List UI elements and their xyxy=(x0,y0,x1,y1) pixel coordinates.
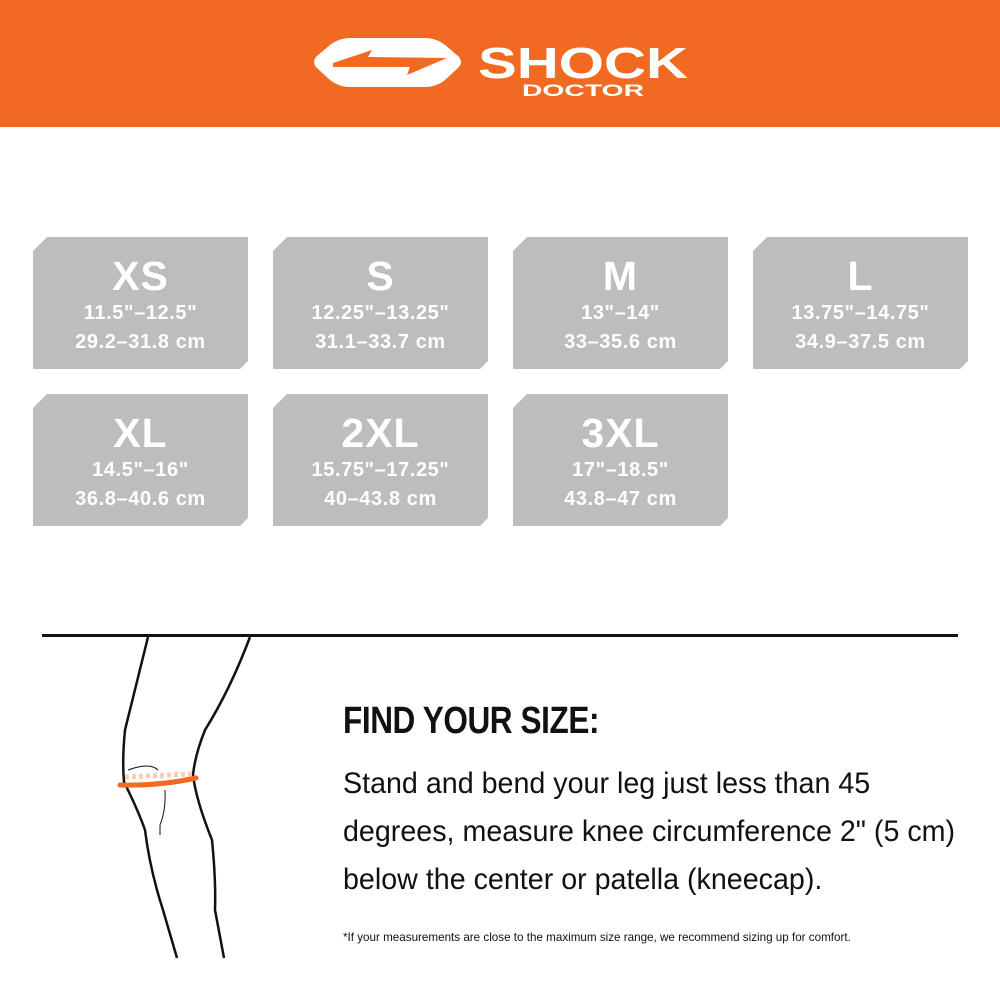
card XL: 14.5"–16" xyxy=(92,459,189,481)
card M: 13"–14" xyxy=(581,302,660,324)
card XS: XS xyxy=(112,253,169,299)
card S: 31.1–33.7 cm xyxy=(315,331,446,353)
card 3XL: 43.8–47 cm xyxy=(564,488,677,510)
card 2XL: 15.75"–17.25" xyxy=(312,459,450,481)
card S xyxy=(273,237,488,369)
logo: SHOCK xyxy=(478,39,688,88)
leg illustration xyxy=(118,637,252,958)
header bar xyxy=(0,0,1000,127)
card XS: 11.5"–12.5" xyxy=(84,302,197,324)
card 3XL: 3XL xyxy=(581,410,660,456)
heading: FIND YOUR SIZE: xyxy=(343,700,599,742)
card XL xyxy=(33,394,248,526)
logo: DOCTOR xyxy=(522,81,644,100)
card M xyxy=(513,237,728,369)
card 2XL: 40–43.8 cm xyxy=(324,488,437,510)
card XS: 29.2–31.8 cm xyxy=(75,331,206,353)
card XL: XL xyxy=(113,410,168,456)
card L xyxy=(753,237,968,369)
card S: 12.25"–13.25" xyxy=(312,302,450,324)
instructions xyxy=(343,767,955,896)
card 2XL: 2XL xyxy=(341,410,420,456)
card XL: 36.8–40.6 cm xyxy=(75,488,206,510)
card 3XL: 17"–18.5" xyxy=(572,459,669,481)
instructions: Stand and bend your leg just less than 45 xyxy=(343,767,870,800)
card M: M xyxy=(603,253,638,299)
card L: L xyxy=(847,253,874,299)
card L: 13.75"–14.75" xyxy=(792,302,930,324)
instructions: degrees, measure knee circumference 2" (5 cm) xyxy=(343,815,955,848)
card L: 34.9–37.5 cm xyxy=(795,331,926,353)
card 2XL xyxy=(273,394,488,526)
card S: S xyxy=(366,253,395,299)
logo xyxy=(314,38,688,100)
card XS xyxy=(33,237,248,369)
footnote: *If your measurements are close to the maximum size range, we recommend sizing up for comfort. xyxy=(343,930,851,944)
instructions: below the center or patella (kneecap). xyxy=(343,863,822,896)
card M: 33–35.6 cm xyxy=(564,331,677,353)
card 3XL xyxy=(513,394,728,526)
